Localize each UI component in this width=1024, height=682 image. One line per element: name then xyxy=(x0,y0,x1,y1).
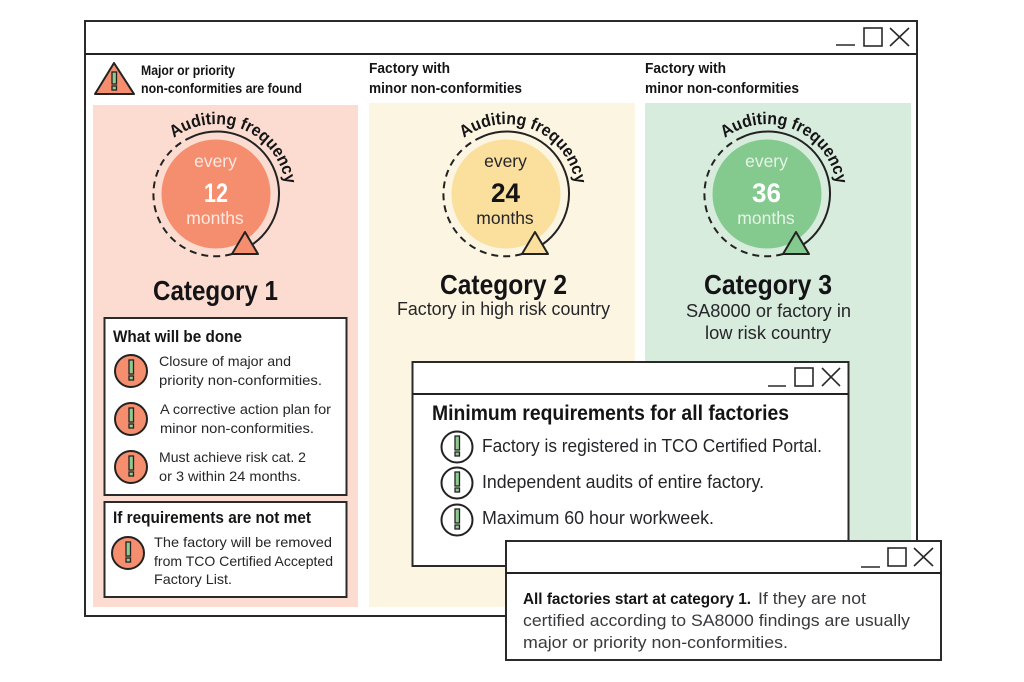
consequence text: from TCO Certified Accepted xyxy=(154,553,333,569)
action: corrective plan: minor non-conformities. xyxy=(160,420,314,436)
icon: alert xyxy=(442,432,472,462)
window: minimum requirements xyxy=(412,362,848,566)
action: corrective plan xyxy=(160,401,331,436)
auditing frequency dial 36 months xyxy=(703,112,846,258)
icon: alert xyxy=(115,355,147,387)
action: closure: priority non-conformities. xyxy=(159,372,322,388)
consequence text: Factory List. xyxy=(154,571,232,587)
icon: alert xyxy=(442,468,472,498)
icon: alert xyxy=(115,451,147,483)
auditing frequency dial 36 months: every xyxy=(745,151,788,171)
note text xyxy=(523,590,911,652)
window controls xyxy=(768,368,840,386)
auditing frequency dial 24 months: every xyxy=(484,151,527,171)
auditing frequency dial 12 months: months xyxy=(186,208,244,228)
auditing frequency dial 12 months: 12 xyxy=(204,178,228,208)
action: risk category: Must achieve risk cat. 2 xyxy=(159,449,306,465)
icon: alert xyxy=(112,537,144,569)
consequence text xyxy=(154,534,333,587)
category 3 heading: Category 3 xyxy=(704,269,832,300)
warning legend xyxy=(95,62,302,96)
main window controls xyxy=(836,28,909,46)
note text: If they are not xyxy=(758,590,866,608)
panel: category 2 xyxy=(369,103,635,607)
consequence text: The factory will be removed xyxy=(154,534,332,550)
action: risk category xyxy=(159,449,306,484)
action: corrective plan: A corrective action plan for xyxy=(160,401,331,417)
auditing frequency dial 24 months: months xyxy=(476,208,534,228)
auditing frequency dial 12 months: Auditing frequency xyxy=(171,112,294,182)
auditing frequency dial 24 months: 24 xyxy=(491,178,520,208)
icon: alert xyxy=(442,504,472,536)
main window xyxy=(85,21,917,616)
what will be done box: What will be done xyxy=(113,327,242,346)
heading: category 3 condition: Factory with xyxy=(645,61,726,77)
if requirements are not met box: If requirements are not met xyxy=(113,508,311,527)
heading: category 2 condition xyxy=(369,61,522,97)
category 3 description: low risk country xyxy=(705,323,831,343)
warning legend: Major or priority xyxy=(141,62,235,78)
category 2 heading: Category 2 xyxy=(440,269,567,300)
action: closure: Closure of major and xyxy=(159,353,291,369)
note text: All factories start at category 1. xyxy=(523,591,751,608)
minimum requirements heading: Minimum requirements for all factories xyxy=(432,402,789,425)
if requirements are not met box xyxy=(104,502,346,597)
heading: category 3 condition xyxy=(645,61,799,97)
auditing frequency dial 24 months xyxy=(442,112,584,258)
what will be done box xyxy=(104,318,346,495)
requirement: portal: Factory is registered in TCO Certified Portal. xyxy=(482,436,822,456)
auditing frequency dial 12 months xyxy=(152,112,294,258)
category 3 description: SA8000 or factory in xyxy=(686,301,851,321)
auditing frequency dial 24 months: Auditing frequency xyxy=(461,112,584,182)
panel: category 1 xyxy=(93,105,358,607)
icon: alert xyxy=(115,403,147,435)
auditing frequency dial 36 months: months xyxy=(737,208,795,228)
auditing frequency dial 36 months: Auditing frequency xyxy=(722,112,846,182)
note text: major or priority non-conformities. xyxy=(523,634,788,652)
action: closure xyxy=(159,353,322,388)
auditing frequency dial 36 months: 36 xyxy=(752,178,781,208)
warning legend: non-conformities are found xyxy=(141,80,302,96)
category 1 heading: Category 1 xyxy=(153,275,278,306)
action: risk category: or 3 within 24 months. xyxy=(159,468,301,484)
requirement: workweek: Maximum 60 hour workweek. xyxy=(482,508,714,528)
window controls xyxy=(861,548,933,567)
panel: category 3 xyxy=(645,103,911,540)
heading: category 3 condition: minor non-conformities xyxy=(645,81,799,97)
requirement: audits: Independent audits of entire factory. xyxy=(482,472,764,492)
heading: category 2 condition: Factory with xyxy=(369,61,450,77)
heading: category 2 condition: minor non-conformities xyxy=(369,81,522,97)
auditing frequency dial 12 months: every xyxy=(194,151,237,171)
category 3 description xyxy=(686,301,851,343)
category 2 description: Factory in high risk country xyxy=(397,299,610,319)
note text: certified according to SA8000 findings are usually xyxy=(523,612,911,630)
window: all factories note xyxy=(506,541,941,660)
